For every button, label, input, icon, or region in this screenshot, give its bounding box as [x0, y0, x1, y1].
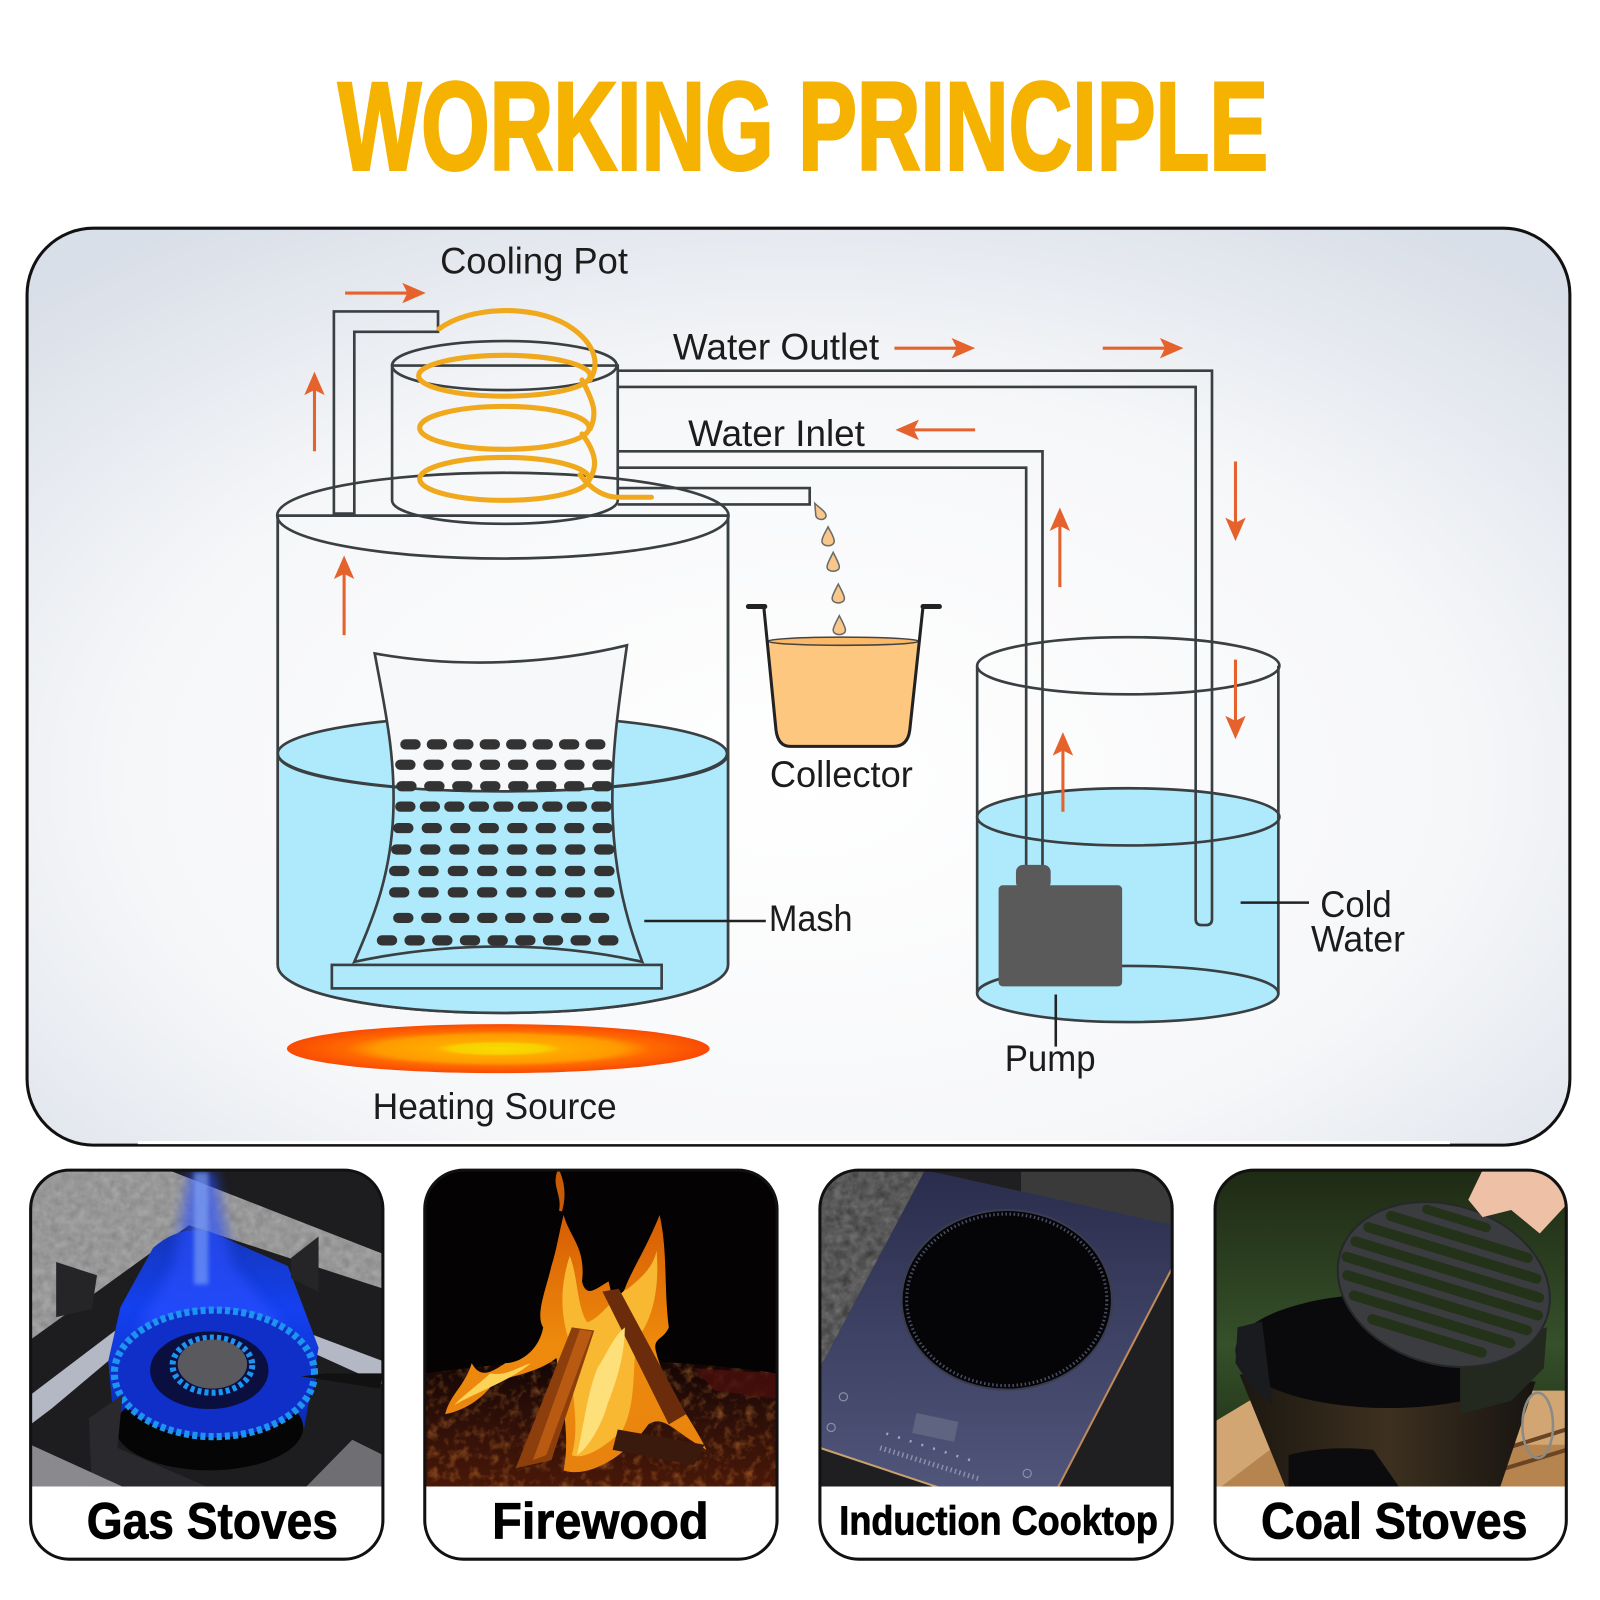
label bar	[1215, 1487, 1566, 1559]
diagram labels: Cooling Pot	[440, 241, 628, 282]
diagram labels: Pump	[1005, 1038, 1096, 1079]
platform under bag	[332, 965, 662, 988]
outlet tube	[618, 488, 810, 504]
collector beaker	[748, 607, 939, 746]
diagram labels: Heating Source	[373, 1086, 617, 1127]
panel: distillation diagram	[27, 228, 1570, 1145]
label bar	[820, 1487, 1172, 1559]
pump	[999, 865, 1122, 986]
cooling pot	[392, 341, 618, 524]
condensate drops	[815, 503, 845, 635]
heating source flame	[287, 1024, 710, 1073]
photo: gas burner	[31, 1170, 383, 1488]
mash grains	[382, 744, 614, 940]
photo: cast iron coal stove	[1215, 1170, 1571, 1488]
diagram labels: Water Inlet	[688, 413, 865, 454]
steam pipe	[334, 311, 438, 514]
leader lines	[644, 903, 1309, 1047]
boiler tank	[277, 473, 729, 1013]
diagram labels: Cold	[1320, 884, 1392, 925]
photo: campfire	[425, 1170, 777, 1487]
flow arrows	[304, 283, 1246, 812]
label: firewood: Firewood	[492, 1493, 709, 1550]
label: induction cooktop: Induction Cooktop	[839, 1498, 1158, 1544]
card: induction cooktop	[820, 1170, 1174, 1559]
card: coal stoves	[1215, 1170, 1571, 1559]
mash bag	[278, 645, 728, 962]
diagram labels	[373, 241, 1405, 1127]
card: firewood	[425, 1170, 777, 1559]
label: coal stoves: Coal Stoves	[1261, 1493, 1528, 1550]
diagram labels: Water	[1311, 919, 1405, 960]
label bar	[425, 1487, 777, 1559]
card: gas stoves	[31, 1170, 383, 1559]
label bar	[31, 1487, 383, 1559]
water pipes	[618, 371, 1212, 925]
copper coil	[419, 311, 651, 500]
diagram labels: Water Outlet	[673, 326, 879, 367]
diagram labels: Mash	[769, 898, 853, 939]
label: gas stoves: Gas Stoves	[87, 1493, 338, 1550]
photo: induction hob	[820, 1170, 1174, 1488]
cold water tank	[977, 637, 1279, 1022]
diagram labels: Collector	[770, 754, 913, 795]
